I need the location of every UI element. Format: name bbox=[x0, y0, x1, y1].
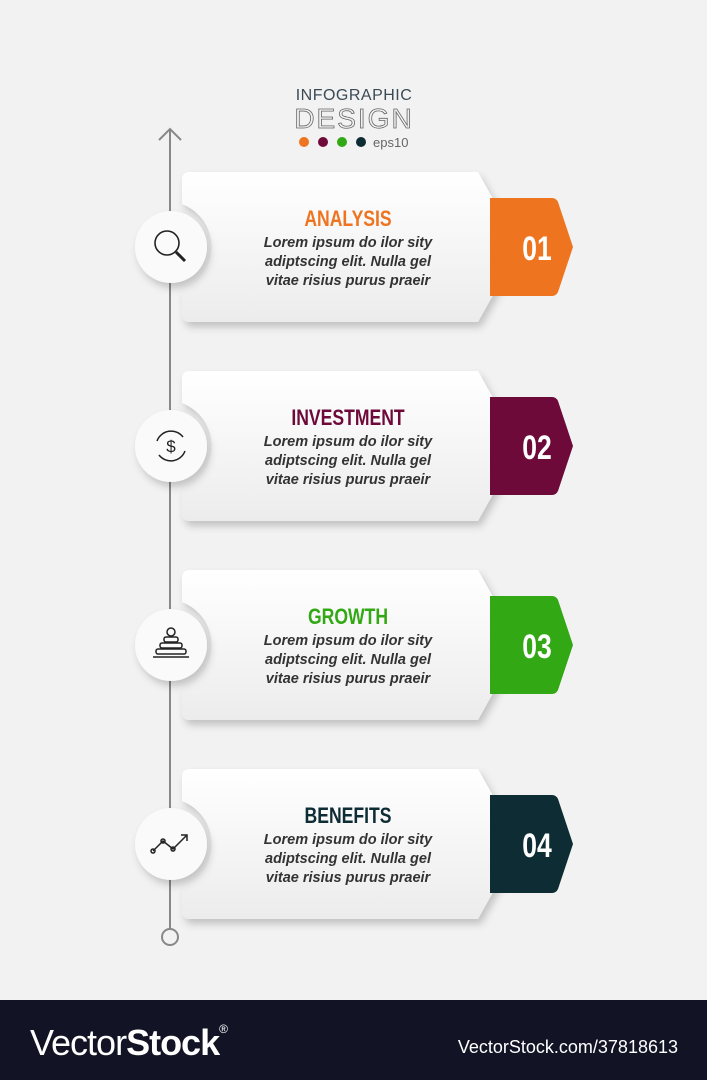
step 3: growth: adiptscing elit. Nulla gel bbox=[265, 652, 432, 668]
step 1: analysis: vitae risius purus praeir bbox=[266, 273, 432, 289]
step 2: investment: INVESTMENT bbox=[291, 406, 405, 431]
timeline arrow bbox=[159, 129, 181, 945]
title: INFOGRAPHIC bbox=[296, 87, 412, 104]
icon: stack bbox=[153, 628, 189, 657]
step 4: benefits: BENEFITS bbox=[305, 804, 391, 829]
step 2: investment: adiptscing elit. Nulla gel bbox=[265, 453, 432, 469]
title: eps10 bbox=[373, 135, 408, 150]
step 4: benefits: adiptscing elit. Nulla gel bbox=[265, 851, 432, 867]
step 1: analysis: Lorem ipsum do ilor sity bbox=[264, 235, 433, 251]
step 1: analysis bbox=[135, 172, 573, 322]
step 4: benefits: vitae risius purus praeir bbox=[266, 870, 432, 886]
step 2: investment: Lorem ipsum do ilor sity bbox=[264, 434, 433, 450]
step 3: growth bbox=[135, 570, 573, 720]
footer: ® bbox=[219, 1022, 228, 1036]
step 4: benefits: Lorem ipsum do ilor sity bbox=[264, 832, 433, 848]
step 4: benefits: 04 bbox=[522, 827, 552, 865]
icon: trend line bbox=[151, 835, 187, 853]
title bbox=[294, 87, 414, 150]
footer bbox=[0, 1000, 707, 1080]
title: DESIGN bbox=[294, 103, 414, 134]
step 2: investment bbox=[135, 371, 573, 521]
step 3: growth: vitae risius purus praeir bbox=[266, 671, 432, 687]
icon: dollar cycle bbox=[157, 431, 185, 461]
icon: magnifier bbox=[155, 231, 185, 261]
step 3: growth: 03 bbox=[522, 628, 552, 666]
step 2: investment: 02 bbox=[522, 429, 552, 467]
step 3: growth: GROWTH bbox=[308, 605, 388, 630]
step 1: analysis: adiptscing elit. Nulla gel bbox=[265, 254, 432, 270]
step 1: analysis: ANALYSIS bbox=[304, 207, 392, 232]
step 1: analysis: 01 bbox=[522, 230, 552, 268]
step 3: growth: Lorem ipsum do ilor sity bbox=[264, 633, 433, 649]
footer: VectorStock.com/37818613 bbox=[458, 1037, 678, 1057]
step 4: benefits bbox=[135, 769, 573, 919]
step 2: investment: vitae risius purus praeir bbox=[266, 472, 432, 488]
icon: dollar cycle: $ bbox=[166, 437, 176, 456]
footer: VectorStock bbox=[30, 1022, 219, 1063]
